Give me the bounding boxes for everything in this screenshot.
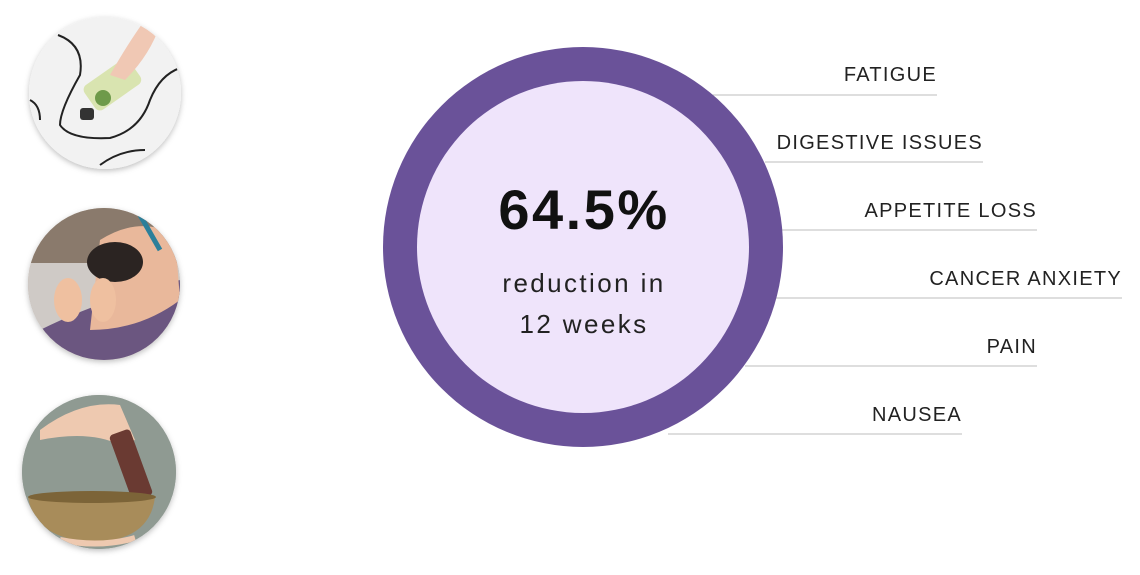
photo: singing bowl (22, 395, 176, 549)
connector lines (668, 95, 1122, 434)
label: nausea: NAUSEA (872, 404, 962, 426)
label: appetite loss: APPETITE LOSS (864, 200, 1037, 222)
photo: water bottle (29, 17, 181, 169)
stat value: 64.5% (498, 178, 670, 241)
label: fatigue: FATIGUE (844, 64, 937, 86)
label: cancer anxiety: CANCER ANXIETY (929, 268, 1122, 290)
ring chart (383, 47, 783, 447)
label: pain: PAIN (987, 336, 1037, 358)
stat caption: reduction in (502, 268, 666, 298)
photo: yoga stretch (28, 208, 180, 363)
label: digestive issues: DIGESTIVE ISSUES (777, 132, 983, 154)
ring chart: 12 weeks (519, 309, 649, 339)
